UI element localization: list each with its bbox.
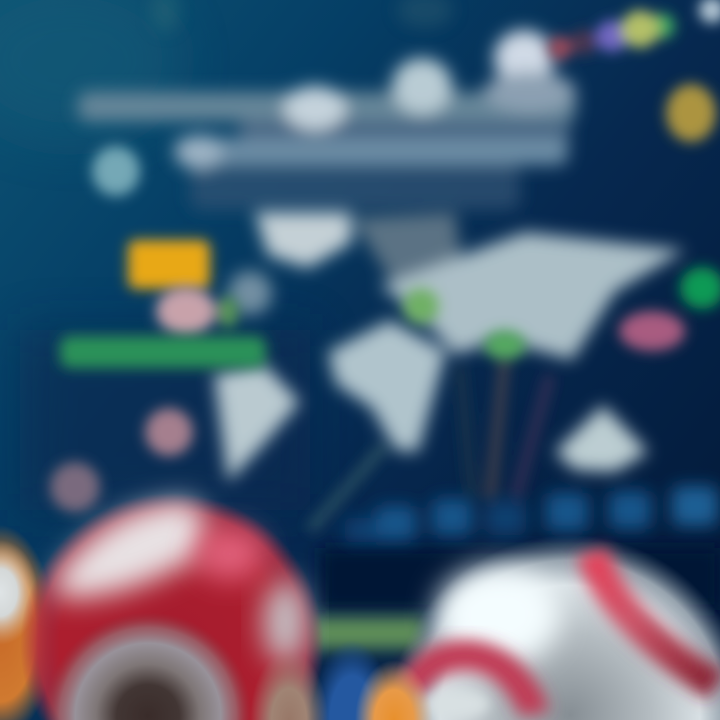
right lottery ball <box>355 535 720 720</box>
bottom green strip <box>312 617 424 649</box>
blue bar row <box>345 486 718 542</box>
left lottery ball <box>20 493 328 720</box>
pink figure <box>156 287 238 335</box>
yellow callout <box>128 240 210 289</box>
icon: teal circle <box>92 146 140 196</box>
bottom blue strip <box>312 640 392 720</box>
title text band <box>78 30 576 210</box>
top right coloured balls <box>548 0 720 60</box>
chart lines <box>310 355 550 530</box>
upper scene <box>50 0 720 542</box>
icon: gold coin <box>666 84 716 142</box>
pink circle <box>145 408 193 456</box>
green map markers <box>403 267 720 360</box>
pink circle <box>50 462 100 512</box>
green bar <box>60 336 266 368</box>
world map <box>214 212 685 482</box>
left orange ball <box>0 525 55 720</box>
pink marker <box>619 311 685 351</box>
